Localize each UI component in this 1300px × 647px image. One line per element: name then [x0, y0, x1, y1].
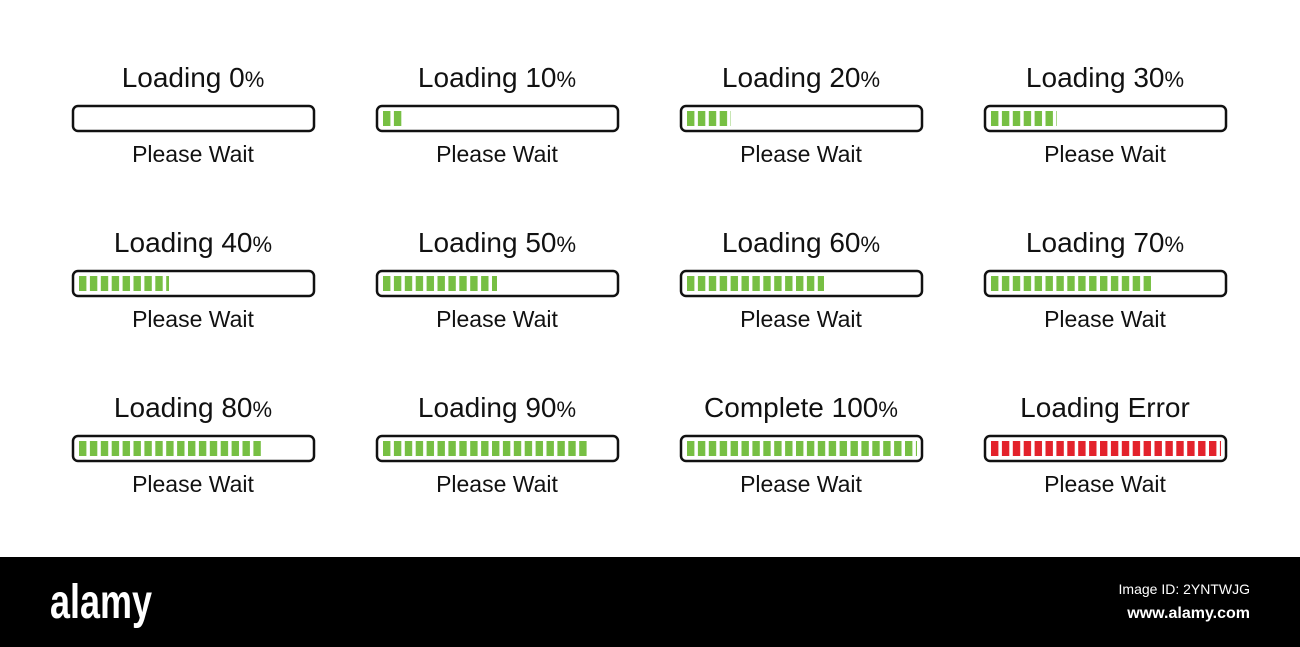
- loader: 0%: Please Wait: [132, 141, 255, 167]
- loader: 70%: Loading 70%: [1026, 227, 1184, 258]
- loader: 90%: Please Wait: [436, 471, 559, 497]
- loader: 60%: Please Wait: [740, 306, 863, 332]
- loader: complete 100%: Complete 100%: [704, 392, 898, 423]
- loader: 50%: Please Wait: [436, 306, 559, 332]
- footer bar: alamy: [50, 576, 152, 629]
- loader: 80%: Loading 80%: [114, 392, 272, 423]
- loader: 80%: [73, 392, 314, 497]
- loader: 40%: Please Wait: [132, 306, 255, 332]
- loader: 90%: [377, 392, 618, 497]
- loader: 60%: Loading 60%: [722, 227, 880, 258]
- loader: 70%: [985, 227, 1226, 332]
- loader: error: [985, 392, 1226, 497]
- loader: 20%: Please Wait: [740, 141, 863, 167]
- loader: 10%: Loading 10%: [418, 62, 576, 93]
- footer bar: [0, 557, 1300, 647]
- loader: 30%: Please Wait: [1044, 141, 1167, 167]
- loader: 40%: Loading 40%: [114, 227, 272, 258]
- loader: 30%: Loading 30%: [1026, 62, 1184, 93]
- loader: 60%: [681, 227, 922, 332]
- loader: error: Please Wait: [1044, 471, 1167, 497]
- loader: 80%: Please Wait: [132, 471, 255, 497]
- loader: error: Loading Error: [1020, 392, 1190, 423]
- loader: 0%: Loading 0%: [122, 62, 264, 93]
- loader: 20%: [681, 62, 922, 167]
- loader: 10%: [377, 62, 618, 167]
- loader: 0%: [73, 62, 314, 167]
- loader: 40%: [73, 227, 314, 332]
- loader: 20%: Loading 20%: [722, 62, 880, 93]
- footer bar: Image ID: 2YNTWJG: [1119, 581, 1250, 597]
- footer bar: www.alamy.com: [1126, 605, 1250, 622]
- loader: 30%: [985, 62, 1226, 167]
- loader: 70%: Please Wait: [1044, 306, 1167, 332]
- loader: 50%: [377, 227, 618, 332]
- loader: complete 100%: Please Wait: [740, 471, 863, 497]
- loader: 10%: Please Wait: [436, 141, 559, 167]
- loader: complete 100%: [681, 392, 922, 497]
- loader: 50%: Loading 50%: [418, 227, 576, 258]
- loader: 90%: Loading 90%: [418, 392, 576, 423]
